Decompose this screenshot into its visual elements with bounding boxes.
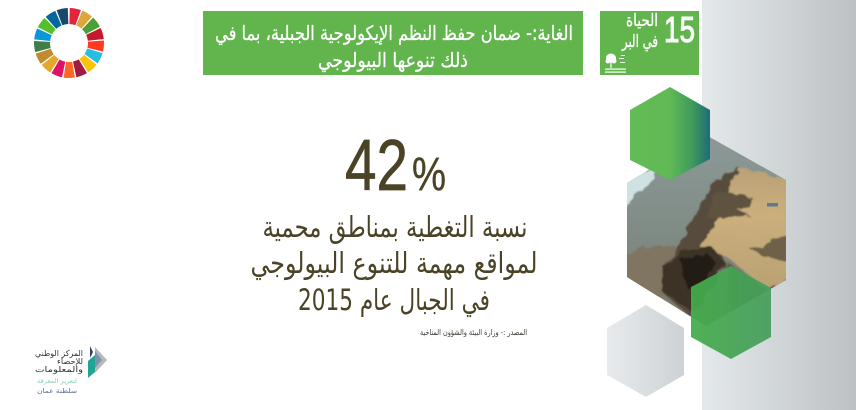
description text bbox=[250, 210, 538, 318]
goal number: 15 bbox=[664, 9, 695, 50]
goal name: الحياة bbox=[626, 11, 658, 31]
right gray panel bbox=[702, 0, 856, 410]
mountain photo hexagon bbox=[627, 137, 786, 326]
description text: نسبة التغطية بمناطق محمية bbox=[262, 210, 528, 244]
logo text: سلطنة عمان bbox=[37, 387, 77, 395]
gray hexagon bbox=[607, 305, 684, 397]
goal name: في البر bbox=[621, 32, 658, 52]
description text: لمواقع مهمة للتنوع البيولوجي bbox=[250, 246, 538, 281]
top green hexagon bbox=[630, 87, 710, 180]
logo mark bbox=[88, 346, 107, 378]
panel: target heading: الغاية:- ضمان حفظ النظم الإيكولوجية الجبلية، بما في bbox=[215, 21, 573, 46]
big number 42%: 42 bbox=[345, 126, 408, 206]
description text: في الجبال عام 2015 bbox=[298, 283, 490, 318]
logo text: للإحصاء bbox=[57, 357, 83, 367]
panel: goal 15 badge bbox=[600, 9, 699, 75]
panel: target heading bbox=[203, 11, 583, 75]
big number 42%: % bbox=[412, 147, 446, 200]
logo text bbox=[35, 349, 83, 395]
source note: المصدر :- وزارة البيئة والشؤون المناخية bbox=[420, 328, 527, 337]
icon: tree and land bbox=[605, 54, 626, 73]
lower green hexagon bbox=[691, 266, 771, 359]
panel: target heading: ذلك تنوعها البيولوجي bbox=[318, 48, 468, 73]
logo: national centre for statistics and information bbox=[35, 346, 107, 395]
goal name bbox=[621, 11, 658, 52]
logo text: والمعلومات bbox=[35, 365, 83, 374]
icon: SDG colour wheel bbox=[42, 16, 96, 70]
logo text: المركز الوطني bbox=[35, 349, 83, 358]
logo text: لتعزيز المعرفة bbox=[37, 377, 77, 385]
